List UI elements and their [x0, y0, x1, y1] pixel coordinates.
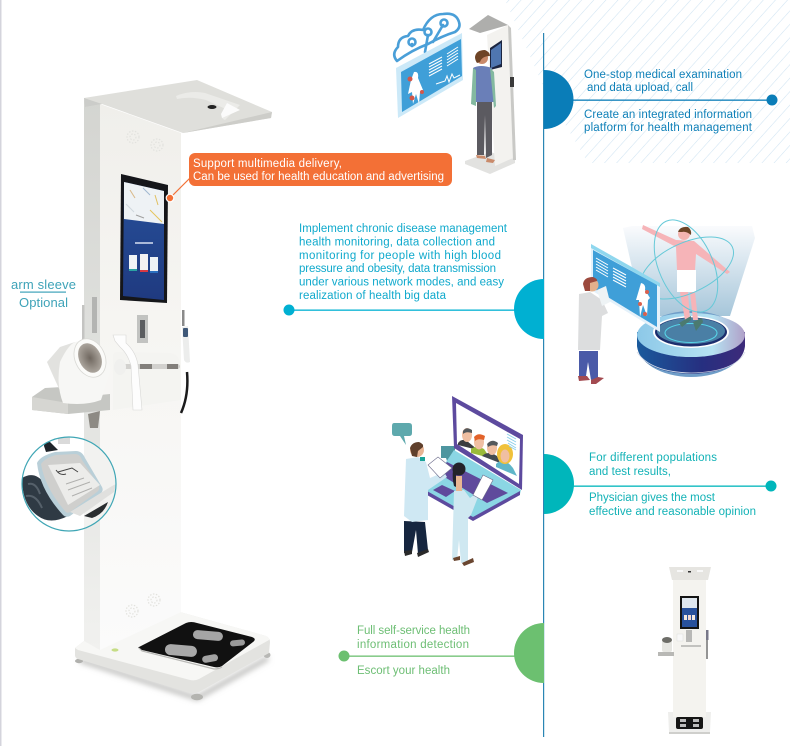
body data panel	[591, 244, 660, 332]
small kiosk details	[686, 630, 692, 642]
callout: multimedia delivery	[166, 153, 452, 202]
text: physician opinion: Physician gives the most	[589, 492, 716, 504]
text: self-service detection	[357, 625, 470, 677]
kiosk receipt shelf and handle	[113, 335, 181, 410]
doctor	[578, 292, 608, 350]
kiosk side rails	[82, 297, 97, 341]
data panel	[396, 33, 463, 118]
man	[477, 102, 492, 158]
text: one-stop examination	[584, 69, 753, 134]
label: arm sleeve optional	[11, 277, 76, 310]
icon: cloud network	[394, 14, 460, 61]
scanned figure	[642, 225, 730, 331]
female doctor	[452, 462, 493, 566]
page left edge strip	[0, 0, 2, 746]
small kiosk screen	[680, 596, 699, 629]
light beam	[623, 226, 755, 316]
text: self-service detection: Full self-service health	[357, 625, 470, 637]
illustration: doctors on video consultation with laptop	[392, 396, 523, 566]
small kiosk scale	[676, 717, 703, 729]
text: chronic disease management: Implement chronic disease management	[299, 223, 508, 235]
text: physician opinion: and test results,	[589, 466, 671, 478]
mini kiosk	[465, 152, 515, 174]
illustration: small kiosk front view	[658, 567, 711, 734]
small kiosk base	[668, 712, 711, 732]
kiosk top hood	[84, 80, 272, 133]
text: chronic disease management: health monitoring, data collection and	[299, 236, 495, 248]
small kiosk column	[673, 577, 706, 717]
text: self-service detection: Escort your health	[357, 665, 450, 677]
speech bubbles	[392, 423, 412, 445]
text: one-stop examination: platform for health management	[584, 122, 753, 134]
node 3: physician opinion	[544, 452, 776, 518]
kiosk column	[84, 100, 181, 650]
text: chronic disease management: pressure and obesity, data transmission	[299, 263, 496, 275]
scan platform	[637, 311, 745, 377]
main health kiosk product photo	[32, 80, 272, 700]
text: one-stop examination: Create an integrated information	[584, 109, 752, 121]
laptop	[427, 450, 521, 520]
central vertical timeline	[543, 33, 544, 737]
kiosk handheld sensor and cable	[181, 310, 190, 413]
text: chronic disease management: monitoring for people with high blood	[299, 250, 501, 262]
text: physician opinion	[589, 452, 756, 518]
text: physician opinion: effective and reasonable opinion	[589, 506, 756, 518]
label: arm sleeve optional: Optional	[19, 295, 68, 310]
text: chronic disease management: under various network modes, and easy	[299, 276, 504, 288]
male doctor	[404, 442, 452, 557]
blood pressure cuff device	[32, 334, 112, 428]
callout: multimedia delivery: Can be used for health education and advertising	[193, 171, 444, 183]
kiosk touch screen	[120, 174, 168, 303]
callout: multimedia delivery: Support multimedia delivery,	[193, 158, 342, 170]
video call faces	[458, 428, 517, 476]
node 1: one-stop examination	[544, 69, 778, 134]
text: one-stop examination: and data upload, call	[587, 82, 693, 94]
detail circle: arm sleeve close-up	[21, 436, 117, 532]
illustration: doctor viewing body scan on platform	[578, 210, 755, 384]
kiosk scale plate	[138, 622, 255, 669]
text: self-service detection: information detection	[357, 639, 469, 651]
kiosk printer slot	[137, 315, 148, 343]
illustration: man using kiosk with cloud data panel	[394, 14, 516, 174]
small kiosk cuff	[658, 652, 674, 656]
text: one-stop examination: One-stop medical examination	[584, 69, 742, 81]
node 2: chronic disease management	[284, 223, 544, 339]
kiosk base	[75, 612, 270, 700]
hatched background panel	[505, 0, 790, 163]
text: chronic disease management	[299, 223, 508, 302]
label: arm sleeve optional: arm sleeve	[11, 277, 76, 292]
orbit rings	[631, 210, 743, 322]
text: physician opinion: For different populations	[589, 452, 717, 464]
text: chronic disease management: realization of health big data	[299, 290, 447, 302]
node 4: self-service detection	[338, 623, 544, 683]
